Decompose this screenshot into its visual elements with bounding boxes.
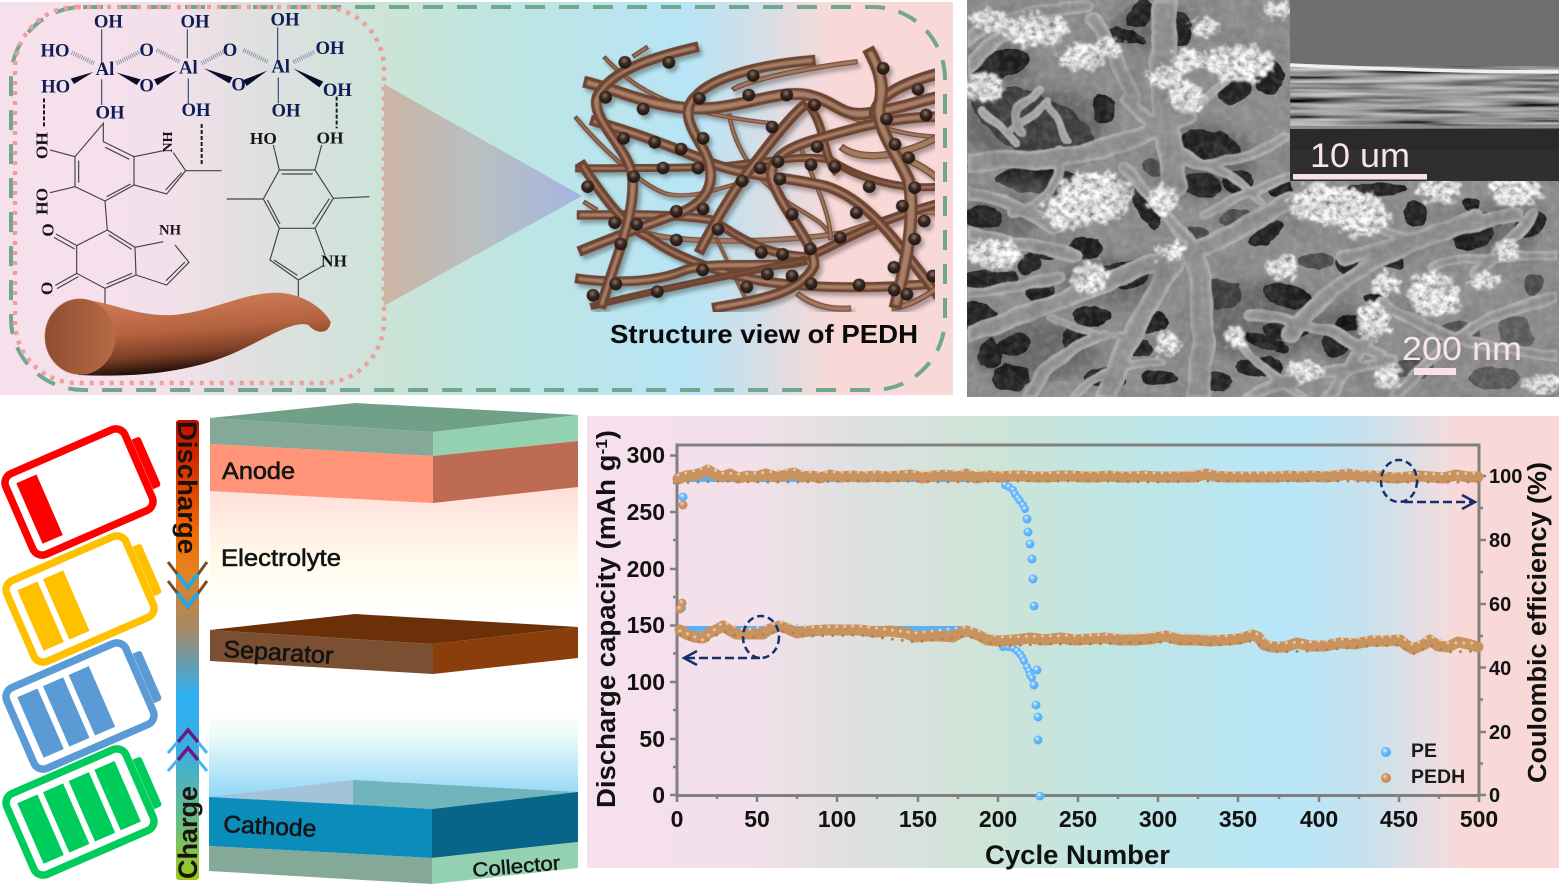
chemical structure bbox=[32, 10, 369, 376]
panel: PEDH structure background bbox=[0, 2, 953, 395]
left axis values: 0 bbox=[652, 782, 665, 808]
scale bar: 10 um: 10 um bbox=[1310, 137, 1410, 175]
aluminium hydroxide labels: OH bbox=[181, 100, 211, 121]
battery icon: red, one cell bbox=[2, 421, 168, 558]
nanoparticles bbox=[581, 56, 939, 302]
polydopamine labels: NH bbox=[321, 252, 348, 271]
aluminium hydroxide labels: Al bbox=[179, 57, 198, 78]
thick fibers bbox=[575, 47, 939, 309]
right axis values: 80 bbox=[1489, 530, 1511, 552]
aluminium hydroxide labels: Al bbox=[96, 59, 114, 80]
x axis values: 300 bbox=[1139, 806, 1177, 832]
SEM tonal mottling bbox=[967, 0, 1559, 397]
PE series bbox=[678, 479, 1044, 800]
nanoparticle clusters bbox=[963, 0, 1559, 395]
aluminium hydroxide labels: OH bbox=[180, 11, 210, 32]
label: Separator: Separator bbox=[223, 636, 334, 670]
label: Discharge: Discharge bbox=[172, 421, 202, 554]
wedge bonds bbox=[71, 68, 323, 87]
legend: PEDH bbox=[1411, 766, 1465, 788]
x axis values: 150 bbox=[899, 806, 937, 832]
polydopamine labels bbox=[32, 128, 348, 295]
x axis values: 350 bbox=[1219, 806, 1257, 832]
green dashed outline bbox=[11, 7, 945, 390]
label: Collector: Collector bbox=[472, 852, 561, 882]
polydopamine skeleton bbox=[50, 123, 369, 305]
right axis values: 0 bbox=[1489, 785, 1500, 807]
battery icon: yellow, two cells bbox=[3, 528, 169, 665]
x axis values: 0 bbox=[671, 806, 683, 832]
fiber bbox=[45, 293, 331, 376]
polydopamine labels: HO bbox=[250, 129, 277, 148]
left axis values: 150 bbox=[627, 612, 665, 638]
axis ticks bbox=[670, 456, 1486, 802]
aluminium hydroxide labels bbox=[40, 10, 352, 123]
aluminium hydroxide labels: O bbox=[139, 76, 154, 97]
label: Anode: Anode bbox=[222, 458, 295, 485]
aluminium hydroxide labels: OH bbox=[95, 102, 125, 123]
layer: cathode with collector bbox=[209, 780, 578, 884]
polydopamine labels: NH bbox=[161, 131, 176, 152]
label: Electrolyte: Electrolyte bbox=[221, 545, 341, 572]
panel: SEM micrograph bbox=[955, 0, 1559, 398]
axis title: Discharge capacity: ) bbox=[593, 430, 621, 439]
zoom cone bbox=[384, 84, 582, 306]
pink dotted molecule callout bbox=[15, 7, 384, 383]
nanofibers bbox=[968, 0, 1557, 398]
aluminium hydroxide labels: HO bbox=[41, 76, 70, 97]
shaded depth behind pores bbox=[956, 3, 1542, 381]
hydrogen bonds bbox=[44, 97, 337, 166]
aluminium hydroxide labels: O bbox=[139, 40, 154, 61]
thin fibers bbox=[575, 47, 939, 300]
layer: anode with collector bbox=[210, 403, 578, 503]
battery icon: green, four cells bbox=[3, 741, 169, 878]
axis title: Coulombic efficiency: Coulombic efficiency (%) bbox=[1524, 462, 1552, 783]
left axis values: 100 bbox=[627, 669, 665, 695]
axis title: Discharge capacity: -1 bbox=[594, 439, 611, 455]
x axis values: 100 bbox=[818, 806, 856, 832]
aluminium hydroxide labels: HO bbox=[40, 40, 70, 61]
aluminium hydroxide labels: OH bbox=[315, 38, 345, 59]
x axis values: 200 bbox=[979, 806, 1017, 832]
scale bar: 10 um bbox=[1293, 137, 1427, 180]
SEM grain bbox=[967, 0, 1559, 397]
x axis values: 500 bbox=[1460, 806, 1498, 832]
polydopamine labels: NH bbox=[159, 222, 182, 238]
left axis values: 300 bbox=[627, 442, 665, 468]
charge chevrons bbox=[168, 730, 207, 771]
right axis values bbox=[1489, 466, 1522, 807]
aluminium hydroxide labels: OH bbox=[323, 80, 352, 101]
left axis values: 200 bbox=[627, 556, 665, 582]
discharge chevrons bbox=[168, 562, 207, 607]
left axis values bbox=[627, 442, 665, 808]
right axis values: 100 bbox=[1489, 466, 1522, 488]
chart: cycling performance bbox=[593, 430, 1552, 870]
aluminium hydroxide labels: Al bbox=[271, 57, 290, 78]
polydopamine labels: O bbox=[38, 223, 57, 237]
membrane layers bbox=[1290, 66, 1559, 129]
aluminium hydroxide labels: OH bbox=[270, 10, 300, 31]
battery icon: blue, three cells bbox=[3, 635, 169, 772]
aluminium hydroxide labels: OH bbox=[271, 101, 301, 122]
right axis values: 20 bbox=[1489, 722, 1511, 744]
PEDH series bbox=[676, 466, 1478, 654]
label: Charge: Charge bbox=[173, 786, 203, 879]
x axis values: 50 bbox=[744, 806, 770, 832]
left axis values: 50 bbox=[639, 726, 665, 752]
aluminium hydroxide labels: O bbox=[223, 40, 237, 61]
legend: PE bbox=[1411, 740, 1437, 762]
right axis values: 40 bbox=[1489, 658, 1511, 680]
electrolyte gradient bbox=[209, 487, 578, 800]
callout: efficiency axis marker bbox=[1381, 460, 1475, 509]
polydopamine labels: HO bbox=[32, 188, 51, 215]
axis title: Cycle Number: Cycle Number bbox=[985, 840, 1170, 870]
discharge/charge gradient bar bbox=[172, 420, 203, 880]
x axis values bbox=[671, 806, 1498, 832]
layer: separator bbox=[210, 614, 578, 674]
polydopamine labels: OH bbox=[317, 128, 344, 147]
x axis values: 450 bbox=[1380, 806, 1418, 832]
fiber network with nanoparticles bbox=[575, 47, 939, 309]
inset: cross-section SEM bbox=[1290, 0, 1559, 181]
x axis values: 250 bbox=[1059, 806, 1097, 832]
polydopamine labels: O bbox=[38, 282, 57, 295]
callout: capacity axis marker bbox=[684, 616, 779, 665]
left axis values: 250 bbox=[627, 499, 665, 525]
x axis values: 400 bbox=[1300, 806, 1338, 832]
axis frame bbox=[677, 445, 1479, 796]
label: Cathode: Cathode bbox=[223, 811, 317, 843]
aluminium hydroxide labels: O bbox=[231, 74, 246, 95]
polydopamine labels: OH bbox=[32, 132, 51, 159]
axis title: Discharge capacity: Discharge capacity (mAh g bbox=[593, 481, 621, 808]
scale bar: 200 nm: 200 nm bbox=[1402, 330, 1522, 367]
caption: structure view: Structure view of PEDH bbox=[610, 319, 918, 349]
aluminium hydroxide bonds bbox=[72, 27, 315, 105]
aluminium hydroxide labels: OH bbox=[94, 11, 123, 32]
right axis values: 60 bbox=[1489, 594, 1511, 616]
pores bbox=[955, 0, 1551, 391]
legend bbox=[1381, 740, 1465, 788]
panel: cycling chart background bbox=[587, 416, 1559, 868]
